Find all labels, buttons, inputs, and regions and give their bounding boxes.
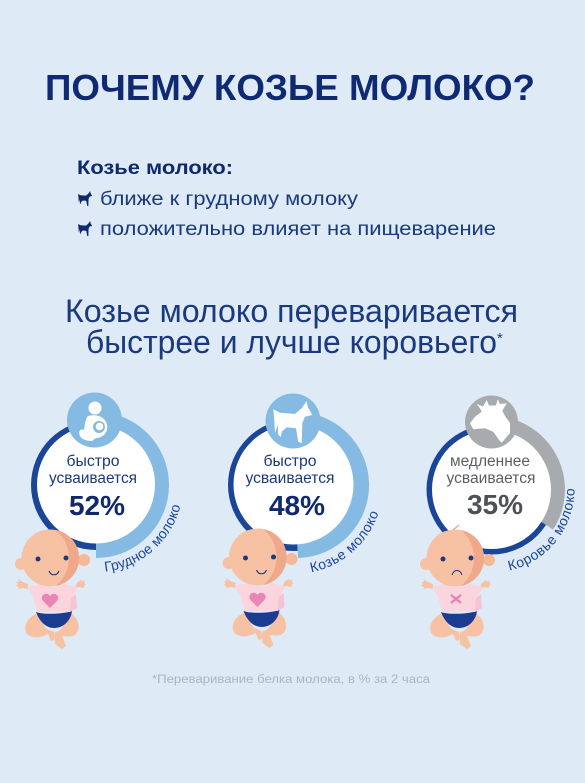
ring text	[246, 453, 334, 521]
ring chart: 48%	[228, 412, 369, 558]
icon: bullet goat 2	[78, 221, 92, 236]
ring text: быстро	[66, 453, 120, 470]
ring text: 35%	[467, 489, 523, 520]
icon: bullet goat 1	[78, 191, 92, 206]
ring text: усваивается	[446, 470, 536, 487]
icon: goat	[266, 394, 320, 448]
heading: digestion comparison	[65, 293, 518, 360]
ring chart: 35%	[426, 416, 565, 554]
bullet text 1: ближе к грудному молоку	[100, 189, 359, 210]
baby: happy	[222, 528, 298, 648]
text block: goat milk benefits	[77, 157, 496, 240]
panel: breast milk	[15, 392, 180, 649]
rotated label: Грудное молоко	[104, 505, 180, 574]
baby: sad	[420, 525, 495, 649]
subheading: Козье молоко:	[77, 157, 233, 179]
heading: digestion comparison: *	[497, 330, 503, 347]
heading: digestion comparison: Козье молоко переваривается	[65, 293, 518, 329]
baby: happy	[15, 530, 90, 649]
panel: goat milk	[222, 394, 378, 648]
ring text	[49, 453, 137, 521]
icon: cow	[465, 396, 518, 448]
title: ПОЧЕМУ КОЗЬЕ МОЛОКО?	[45, 67, 535, 108]
ring text: 52%	[69, 490, 125, 521]
ring text: быстро	[264, 453, 316, 470]
ring text: усваивается	[246, 470, 334, 487]
ring text: медленнее	[450, 453, 530, 470]
rotated label: Коровье молоко	[508, 489, 575, 570]
rotated label: Козье молоко	[310, 512, 378, 572]
ring text: усваивается	[49, 470, 137, 487]
bullet text 2: положительно влияет на пищеварение	[100, 219, 496, 240]
heading: digestion comparison: быстрее и лучше коровьего	[86, 324, 497, 360]
panel: cow milk	[420, 396, 575, 649]
ring text: 48%	[269, 490, 325, 521]
footnote: *Переваривание белка молока, в % за 2 часа	[152, 674, 431, 686]
ring chart: 52%	[31, 412, 169, 558]
ring text	[446, 453, 536, 520]
icon: nursing mother	[67, 392, 122, 448]
